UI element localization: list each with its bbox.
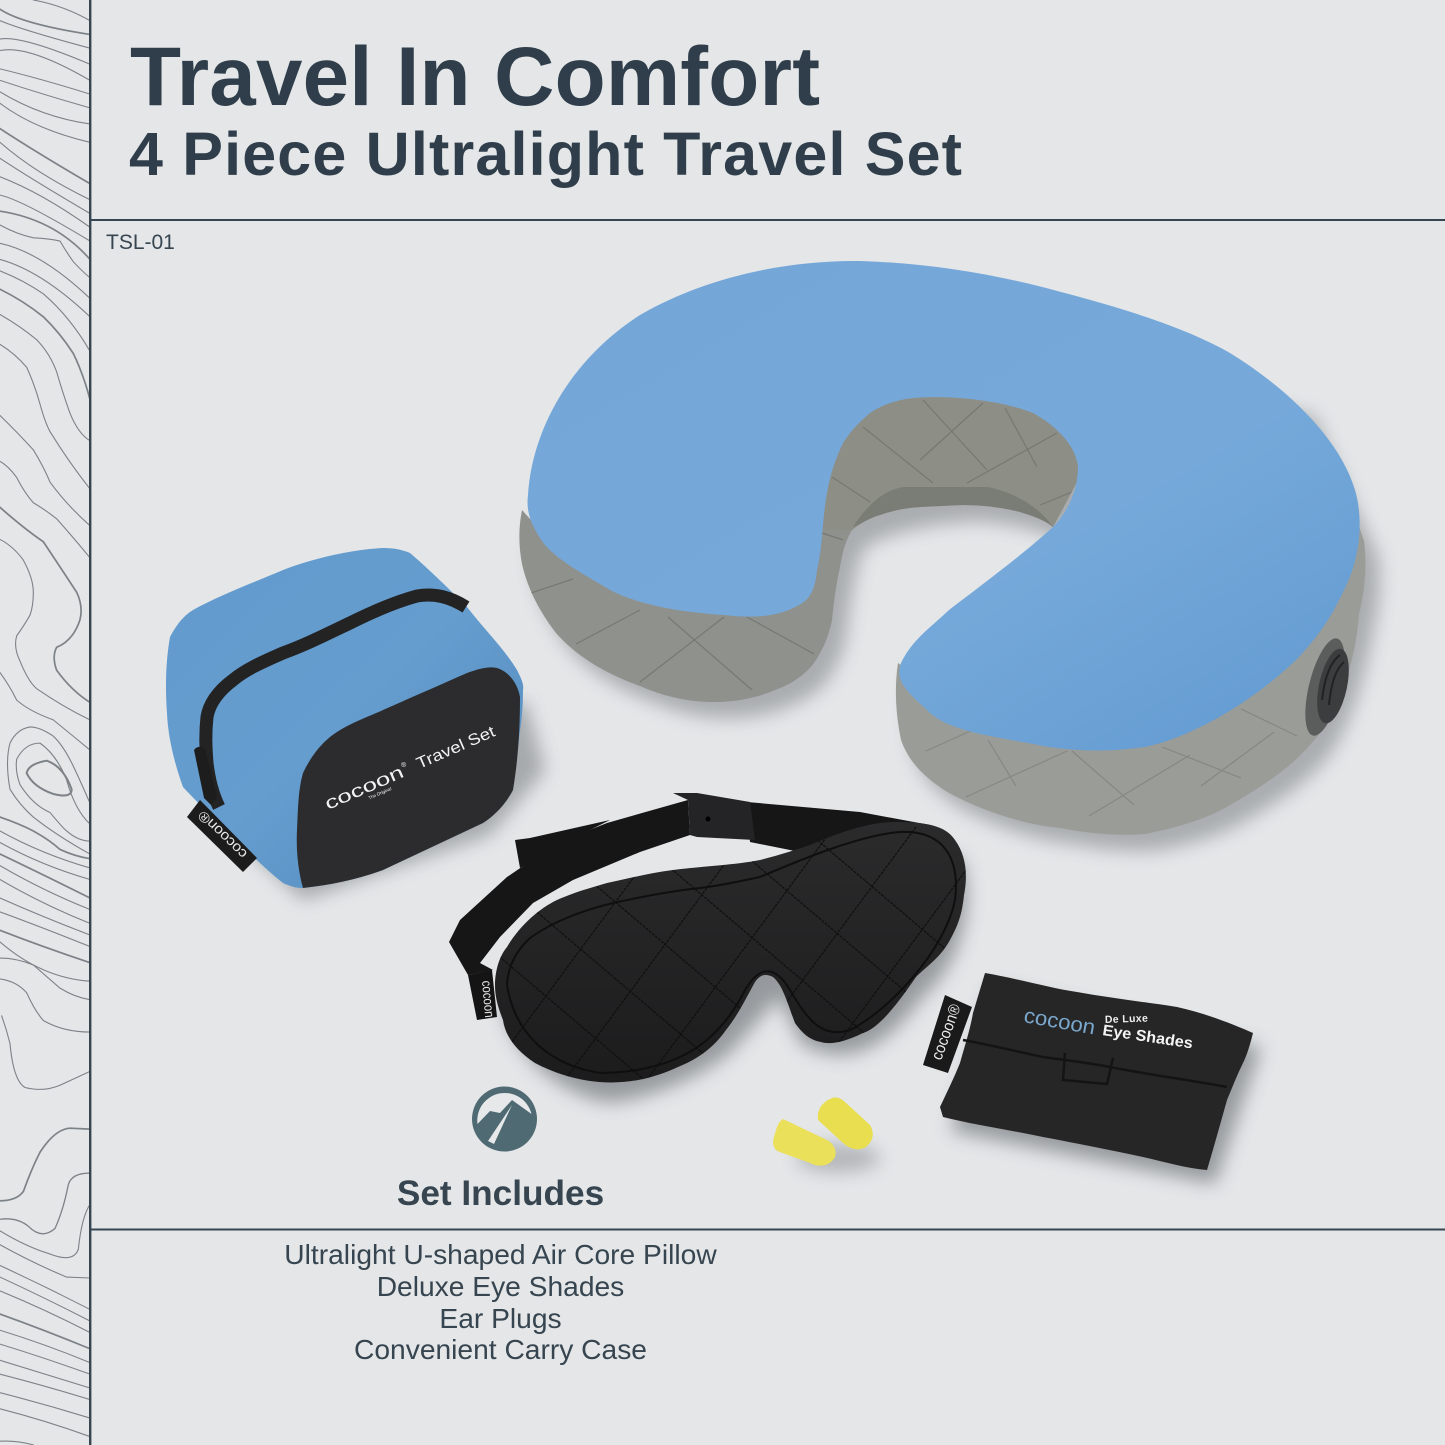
ear plugs [773,1097,880,1172]
product code: TSL-01 [106,231,175,254]
included items list: Ear Plugs [439,1302,562,1334]
ear plug right [818,1097,873,1149]
case shadow [220,700,545,900]
mask shadow [502,853,967,1102]
topographic contour pattern [0,0,90,1445]
heading: set includes: Set Includes [397,1174,604,1213]
ear plug shadow [796,1144,880,1172]
case branding [322,721,500,817]
icon: mountain logo [472,1086,537,1152]
case branding: Travel Set [414,723,498,773]
mask tag [468,970,497,1020]
blue case body [166,548,523,888]
mask body [495,822,966,1082]
subtitle: 4 Piece Ultralight Travel Set [129,120,962,188]
buckle [673,793,755,840]
case tag: cocoon® [194,807,250,862]
case branding: cocoon [322,762,407,814]
title: Travel In Comfort [130,29,820,123]
inner and left gray fleece [519,397,1078,702]
pouch body [940,973,1253,1170]
mask pouch: De Luxe [1105,1012,1148,1026]
quilt stitching [500,826,966,1080]
eye mask [449,793,978,1112]
included items list: Deluxe Eye Shades [377,1270,624,1302]
carry case [166,548,545,900]
case tag [187,800,257,872]
mask pouch [923,973,1261,1184]
case dark panel [297,667,520,888]
case branding: The Original [368,786,392,801]
zipper pull [194,747,217,805]
air valve [1297,635,1355,739]
ear plug left [773,1119,836,1166]
mask pouch: Eye Shades [1101,1022,1194,1052]
pouch tag [923,995,972,1073]
included items list [284,1238,717,1365]
right gray fleece [896,528,1366,835]
elastic strap [449,800,930,975]
pouch flap fold [963,1040,1227,1087]
case zipper [206,595,466,807]
pillow shadow [533,316,1379,851]
included items list: Convenient Carry Case [354,1333,647,1365]
included items list: Ultralight U-shaped Air Core Pillow [284,1238,717,1270]
pouch branding: cocoon [1022,1004,1097,1039]
case branding: ® [400,760,409,770]
pouch tag: cocoon® [929,1002,965,1062]
pouch shadow [951,987,1261,1184]
blue top surface [528,261,1360,750]
U-shaped air core pillow [500,261,1380,851]
mask tag: cocoon [479,980,497,1018]
